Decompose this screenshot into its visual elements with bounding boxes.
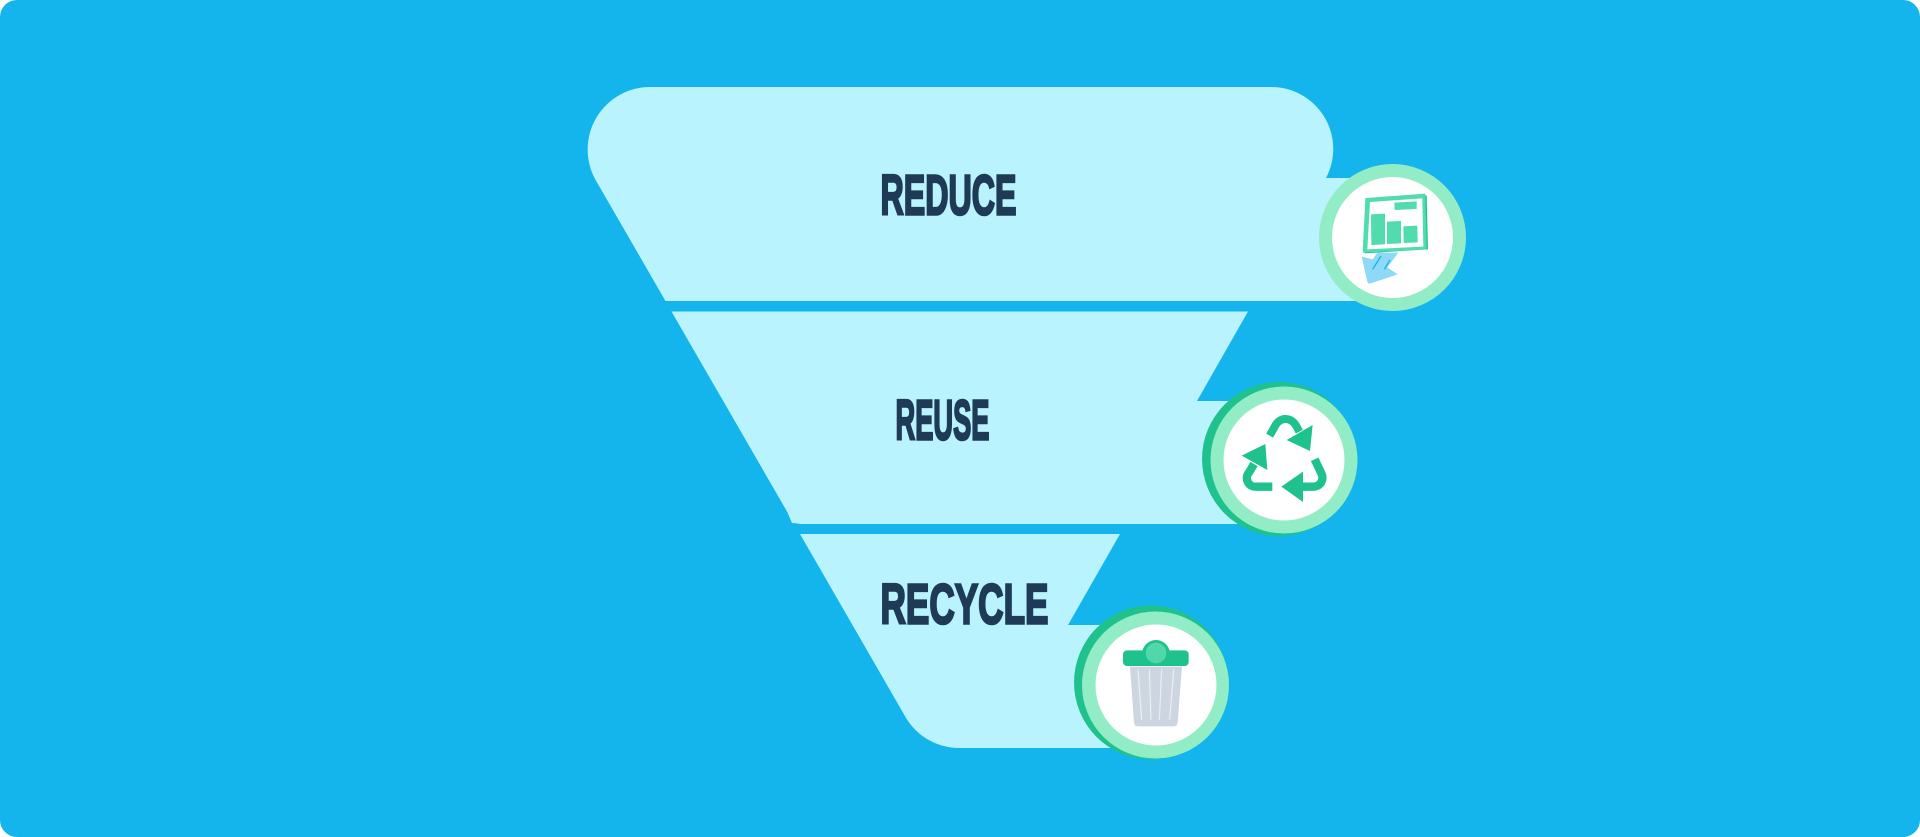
heading: reduce: REDUCE [880,164,1016,228]
funnel tier: reuse [672,312,1290,524]
icon: recycle badge with trash can [1074,606,1229,760]
infographic: reduce reuse recycle funnel: REUSE [896,389,990,453]
icon: reduce badge with chart and arrow [1319,164,1466,311]
funnel tier: recycle [800,534,1160,748]
icon: reuse badge with recycling arrows [1202,382,1358,536]
funnel tier: reduce [588,87,1400,301]
heading: recycle: RECYCLE [880,573,1048,637]
